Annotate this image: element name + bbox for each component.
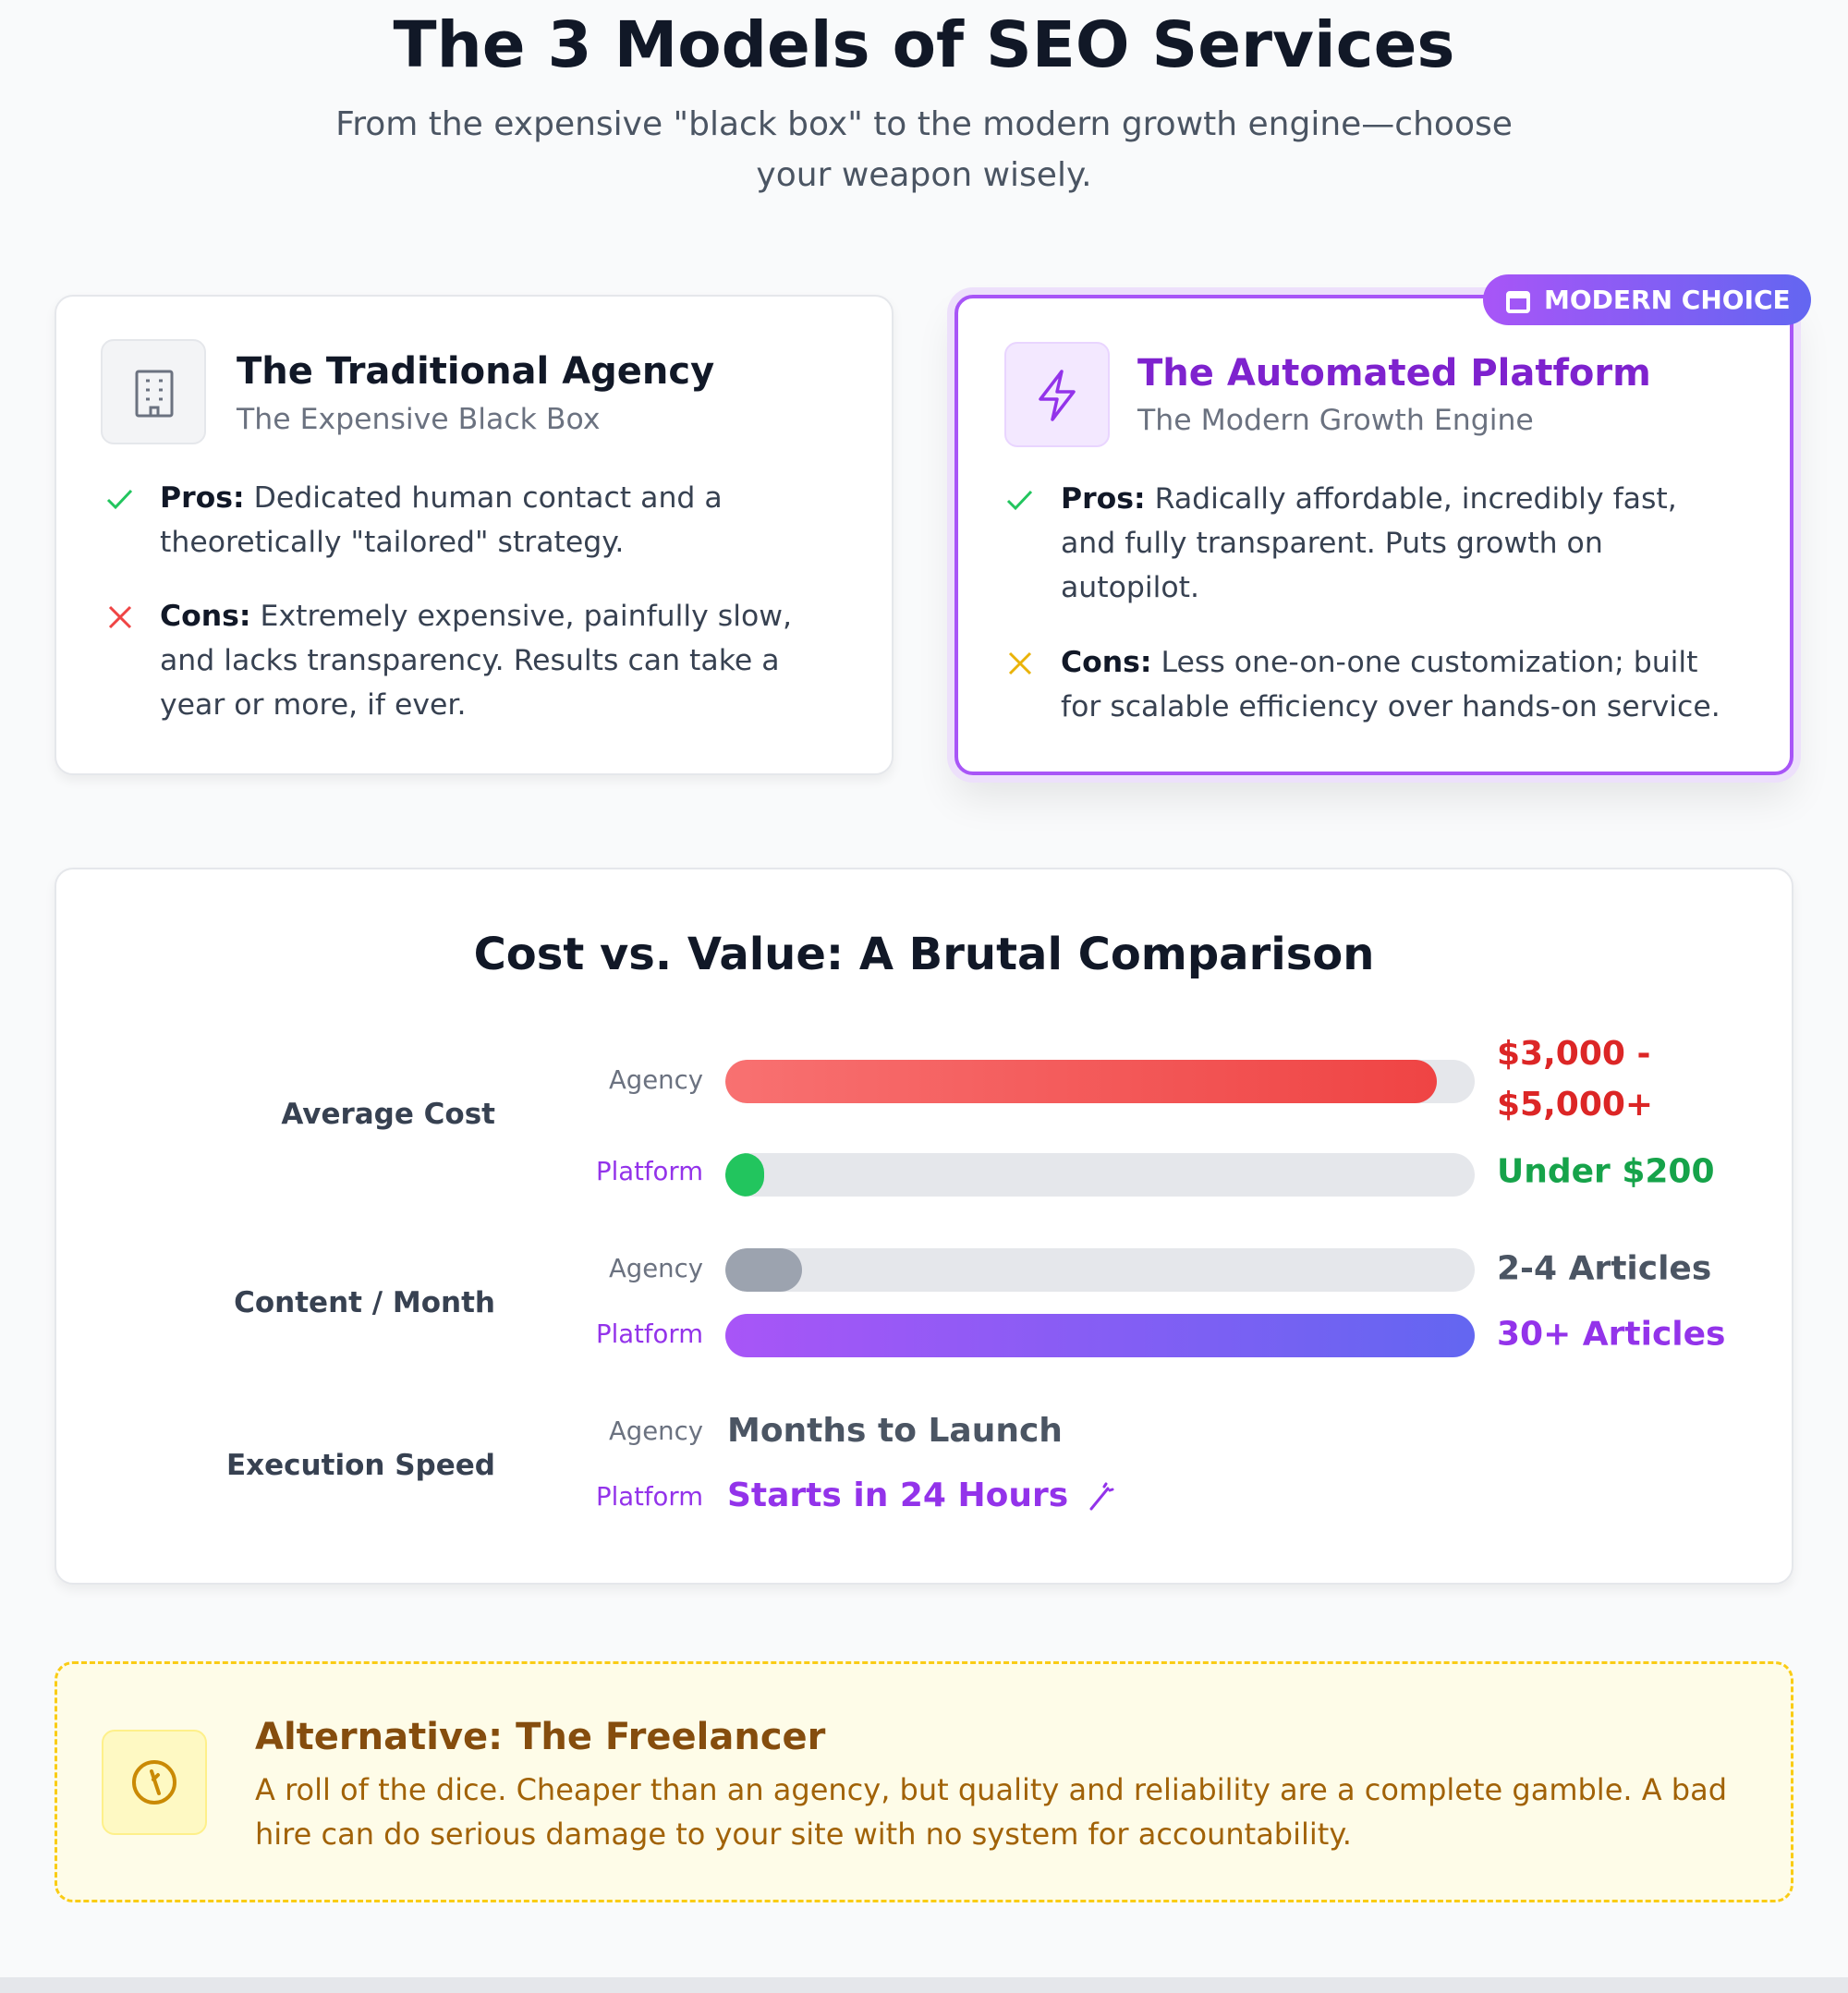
panel: cost vs value [55, 868, 1793, 1585]
row: content per month: Content / Month [234, 1286, 495, 1319]
panel: traditional agency [55, 295, 894, 775]
text: 2-4 Articles [1497, 1249, 1711, 1288]
subheading: The Modern Growth Engine [1137, 404, 1534, 437]
cons [1009, 646, 1720, 723]
text: 30+ Articles [1497, 1316, 1725, 1353]
icon: coin [102, 1730, 207, 1835]
chart heading: Cost vs. Value: A Brutal Comparison [474, 929, 1374, 980]
panel: automated platform [954, 295, 1793, 775]
panel: traditional agency: Cons: Extremely expensive, painfully slow, and lacks transparency. Results can take a year or more, if ever. [160, 600, 792, 722]
title: The 3 Models of SEO Services [394, 8, 1454, 82]
heading: The Automated Platform [1137, 352, 1651, 395]
text: Platform [596, 1157, 703, 1186]
subheading: The Expensive Black Box [237, 403, 600, 436]
icon: calendar [1506, 291, 1530, 313]
text: Agency [609, 1416, 703, 1446]
row: average cost: Average Cost [281, 1098, 495, 1131]
icon: wand [1089, 1482, 1114, 1511]
badge: modern choice [1483, 274, 1811, 325]
icon: lightning [1004, 342, 1110, 447]
text: $5,000+ [1497, 1086, 1653, 1124]
panel: traditional agency: Pros: Dedicated human contact and a theoretically "tailored" strategy. [160, 481, 723, 559]
subtitle: From the expensive "black box" to the modern growth engine—choose [335, 105, 1513, 143]
cons [109, 600, 792, 722]
subtitle: your weapon wisely. [756, 156, 1092, 194]
heading: The Traditional Agency [237, 350, 714, 393]
pros [107, 481, 723, 559]
text: Agency [609, 1065, 703, 1095]
icon: building [101, 339, 206, 444]
text: Platform [596, 1319, 703, 1349]
text: Agency [609, 1254, 703, 1283]
text: Starts in 24 Hours [727, 1477, 1068, 1514]
text: Months to Launch [727, 1412, 1063, 1450]
subtitle [335, 105, 1513, 194]
callout: freelancer [55, 1661, 1793, 1902]
text: Under $200 [1497, 1153, 1715, 1190]
badge: modern choice: MODERN CHOICE [1544, 285, 1791, 315]
text: Platform [596, 1482, 703, 1512]
row: execution speed: Execution Speed [226, 1449, 495, 1482]
panel: automated platform: Cons: Less one-on-one customization; built for scalable efficiency over hands-on service. [1061, 646, 1720, 723]
callout heading: Alternative: The Freelancer [255, 1716, 825, 1758]
callout text: A roll of the dice. Cheaper than an agency, but quality and reliability are a complete gamble. A bad hire can do serious damage to your site with no system for accountability. [255, 1772, 1727, 1852]
panel: automated platform: Pros: Radically affordable, incredibly fast, and fully transparent. Puts growth on autopilot. [1061, 482, 1677, 604]
pros [1007, 482, 1677, 604]
text: $3,000 - [1497, 1035, 1650, 1073]
